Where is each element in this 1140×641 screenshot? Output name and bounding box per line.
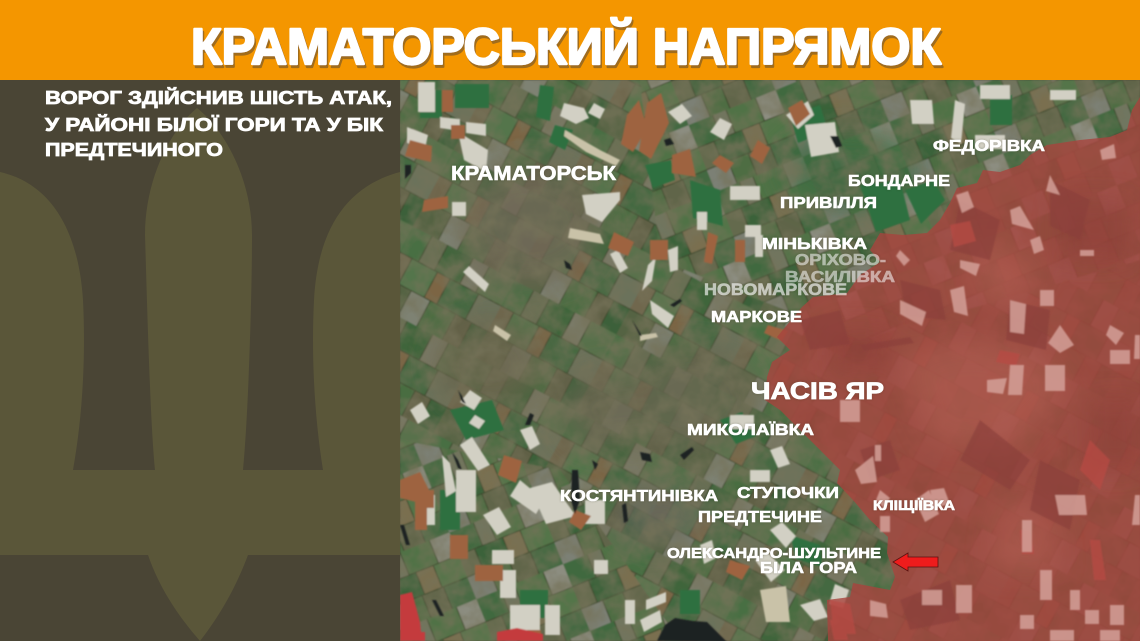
label: Chasiv Yar: ЧАСІВ ЯР xyxy=(751,378,884,405)
map labels xyxy=(451,138,1046,577)
map: terrain tones xyxy=(435,130,920,543)
label: Orikhovo-Vasylivka xyxy=(785,252,896,286)
text block: attack summary: У РАЙОНІ БІЛОЇ ГОРИ ТА У БІК xyxy=(45,114,384,135)
label: Pryvillia: ПРИВІЛЛЯ xyxy=(780,195,877,212)
label: Markove: МАРКОВЕ xyxy=(711,309,802,326)
label: Klishchiivka: КЛІЩІЇВКА xyxy=(873,498,955,513)
label: Novomarkove: НОВОМАРКОВЕ xyxy=(704,280,847,299)
label: Bondarne: БОНДАРНЕ xyxy=(848,173,950,190)
left panel background xyxy=(0,80,400,641)
icon: trident watermark xyxy=(0,108,400,641)
text block: attack summary: ПРЕДТЕЧИНОГО xyxy=(45,140,223,160)
label: Orikhovo-Vasylivka: ОРІХОВО- xyxy=(795,252,886,269)
map: darkening wash xyxy=(400,80,1140,641)
label: Mykolaivka: МИКОЛАЇВКА xyxy=(687,421,815,439)
text block: attack summary xyxy=(45,87,392,160)
label: Kramatorsk: КРАМАТОРСЬК xyxy=(451,163,617,185)
title banner xyxy=(0,0,1140,80)
label: Bila Hora: БІЛА ГОРА xyxy=(760,560,858,577)
map: satellite fields xyxy=(400,82,1076,641)
label: Predtechyne: ПРЕДТЕЧИНЕ xyxy=(698,509,822,526)
label: Kostiantynivka: КОСТЯНТИНІВКА xyxy=(560,488,719,505)
map: occupied territory xyxy=(765,97,1140,641)
title: КРАМАТОРСЬКИЙ НАПРЯМОК xyxy=(191,17,942,75)
text block: attack summary: ВОРОГ ЗДІЙСНИВ ШІСТЬ АТАК, xyxy=(45,87,392,108)
arrow: attack direction xyxy=(893,553,938,571)
map xyxy=(400,80,1140,641)
map: satellite mottling xyxy=(400,80,1140,641)
label: Fedorivka: ФЕДОРІВКА xyxy=(933,138,1046,155)
label: Orikhovo-Vasylivka: ВАСИЛІВКА xyxy=(785,269,896,286)
label: Oleksandro-Shultyne: ОЛЕКСАНДРО-ШУЛЬТИНЕ xyxy=(667,545,881,562)
label: Stupochky: СТУПОЧКИ xyxy=(737,485,839,502)
map: patchwork fields xyxy=(400,80,1140,641)
label: Minkivka: МІНЬКІВКА xyxy=(762,236,868,253)
